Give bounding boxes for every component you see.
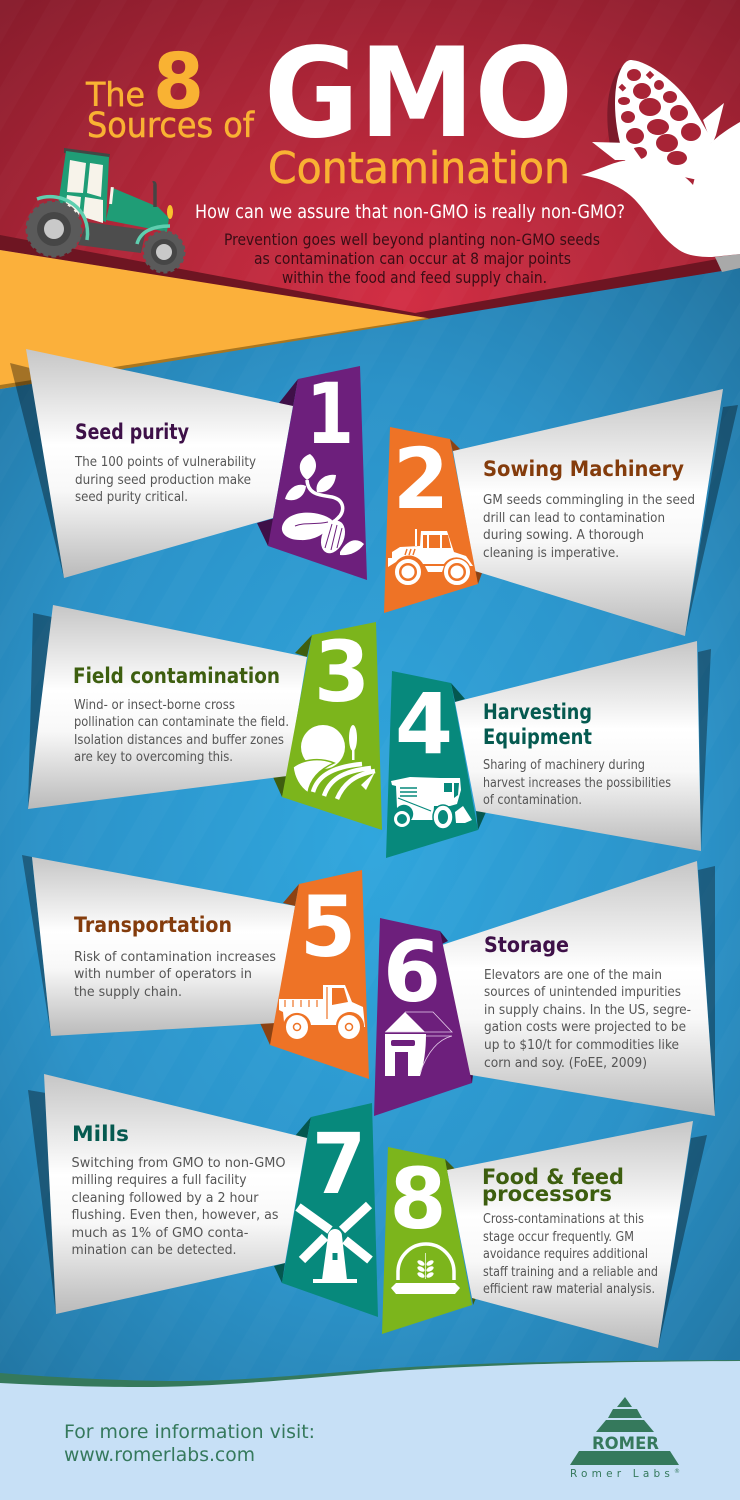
panel 5: transportation — [22, 855, 369, 1079]
logo: Romer Labs: ROMER — [592, 1434, 659, 1454]
ribbon 3 — [282, 622, 382, 830]
heading: Sowing Machinery — [483, 457, 684, 481]
number 4: 4 — [395, 675, 453, 773]
icon: farm tractor — [388, 529, 473, 583]
heading: Food & feed — [482, 1165, 624, 1189]
body text: staff training and a reliable and — [483, 1264, 658, 1280]
heading: The 8 Sources of — [85, 38, 255, 146]
body text: drill can lead to contamination — [483, 510, 665, 526]
header: red banner — [0, 0, 740, 319]
panel 4: harvesting equipment — [386, 641, 711, 858]
body text: cleaning is imperative. — [483, 545, 619, 561]
panel 3: field contamination — [28, 605, 382, 830]
ribbon 6 — [374, 918, 472, 1116]
body text: during sowing. A thorough — [483, 527, 644, 543]
ribbon 1 — [268, 366, 367, 580]
number 8: 8 — [390, 1150, 446, 1248]
body text: seed purity critical. — [75, 489, 188, 505]
number 3: 3 — [314, 623, 370, 721]
number 6: 6 — [383, 923, 441, 1021]
body text: GM seeds commingling in the seed — [483, 492, 695, 508]
panel 1: seed purity — [10, 349, 367, 580]
footer: more information text: For more information visit: — [64, 1421, 315, 1443]
body text — [72, 1155, 286, 1258]
ribbon 8 — [382, 1147, 472, 1334]
body text: Wind- or insect-borne cross — [74, 697, 235, 713]
body text: mination can be detected. — [72, 1242, 236, 1258]
panel 8: food and feed processors — [382, 1121, 707, 1348]
body text: the supply chain. — [74, 984, 182, 1000]
heading: Mills — [72, 1122, 129, 1146]
ribbon 4 — [386, 671, 478, 858]
body text — [74, 697, 289, 765]
heading: Seed purity — [75, 420, 189, 444]
icon: sprout and seeds — [282, 454, 364, 557]
intro paragraph: Prevention goes well beyond planting non-GMO seeds — [224, 230, 600, 249]
body text: milling requires a full facility — [72, 1172, 247, 1188]
body text: gation costs were projected to be — [484, 1019, 686, 1035]
header: yellow wedge — [0, 250, 430, 389]
body text: Sharing of machinery during — [483, 757, 645, 773]
icon: tractor — [27, 148, 184, 272]
heading: The 8 Sources of: Sources of — [87, 106, 255, 146]
number 1: 1 — [306, 365, 354, 463]
body text: in supply chains. In the US, segre- — [484, 1002, 691, 1018]
panel 7: mills — [28, 1074, 378, 1317]
heading: processors — [482, 1182, 612, 1206]
heading: The 8 Sources of: The — [85, 75, 145, 114]
icon: combine harvester — [391, 777, 472, 829]
heading: Harvesting — [483, 700, 592, 724]
panel 2: sowing machinery — [384, 389, 738, 636]
logo: Romer Labs — [570, 1397, 680, 1480]
body text: stage occur frequently. GM — [483, 1229, 634, 1245]
body text: Isolation distances and buffer zones — [74, 732, 284, 748]
body text — [484, 967, 691, 1071]
body text: are key to overcoming this. — [74, 749, 233, 765]
intro paragraph — [224, 230, 600, 287]
footer band — [0, 1360, 740, 1500]
number 2: 2 — [393, 430, 449, 528]
icon: wheat under dome — [391, 1244, 460, 1294]
icon: storage barn — [385, 1012, 452, 1076]
subtitle question: How can we assure that non-GMO is really non-GMO? — [195, 201, 625, 223]
icon: sun and field — [293, 725, 375, 799]
ribbon 7 — [282, 1103, 378, 1317]
body text: Cross-contaminations at this — [483, 1211, 644, 1227]
heading: Contamination: Contamination — [268, 143, 570, 194]
intro paragraph: as contamination can occur at 8 major points — [254, 249, 571, 268]
body text — [74, 949, 276, 1000]
body text — [483, 1211, 658, 1297]
footer: more information text: www.romerlabs.com — [64, 1444, 255, 1466]
body text: cleaning followed by a 2 hour — [72, 1190, 259, 1206]
number 7: 7 — [312, 1115, 366, 1213]
body text: Elevators are one of the main — [484, 967, 662, 983]
icon: windmill — [298, 1205, 370, 1283]
heading: Storage — [484, 933, 569, 957]
body text: avoidance requires additional — [483, 1246, 648, 1262]
number 5: 5 — [300, 878, 356, 976]
body text: corn and soy. (FoEE, 2009) — [484, 1055, 647, 1071]
logo: Romer Labs: Romer Labs — [570, 1468, 670, 1480]
heading: Equipment — [483, 725, 592, 749]
body text: flushing. Even then, however, as — [72, 1207, 278, 1223]
heading: GMO: GMO — [264, 22, 573, 166]
body text: up to $10/t for commodities like — [484, 1037, 679, 1053]
intro paragraph: within the food and feed supply chain. — [282, 268, 547, 287]
logo: Romer Labs: ® — [674, 1468, 680, 1475]
heading: Transportation — [74, 913, 232, 937]
body text — [74, 454, 256, 505]
icon: corn cob — [581, 60, 740, 272]
heading: Field contamination — [73, 664, 280, 688]
panel 6: storage — [374, 861, 715, 1116]
heading — [482, 1165, 624, 1206]
body text: Switching from GMO to non-GMO — [72, 1155, 286, 1171]
body text: sources of unintended impurities — [484, 984, 681, 1000]
ribbon 5 — [270, 870, 369, 1079]
body text — [483, 492, 695, 561]
body text: efficient raw material analysis. — [483, 1281, 655, 1297]
heading: The 8 Sources of: 8 — [153, 38, 204, 127]
body text: of contamination. — [483, 792, 582, 808]
body text: The 100 points of vulnerability — [74, 454, 256, 470]
body text: Risk of contamination increases — [74, 949, 276, 965]
ribbon 2 — [384, 427, 478, 613]
footer: more information text — [64, 1421, 315, 1466]
body text: pollination can contaminate the field. — [74, 714, 289, 730]
icon: truck — [279, 985, 365, 1039]
body text: harvest increases the possibilities — [483, 775, 671, 791]
body text — [483, 757, 671, 808]
body text: with number of operators in — [74, 966, 252, 982]
body text: much as 1% of GMO conta- — [72, 1225, 248, 1241]
body text: during seed production make — [75, 472, 251, 488]
heading — [483, 700, 592, 749]
